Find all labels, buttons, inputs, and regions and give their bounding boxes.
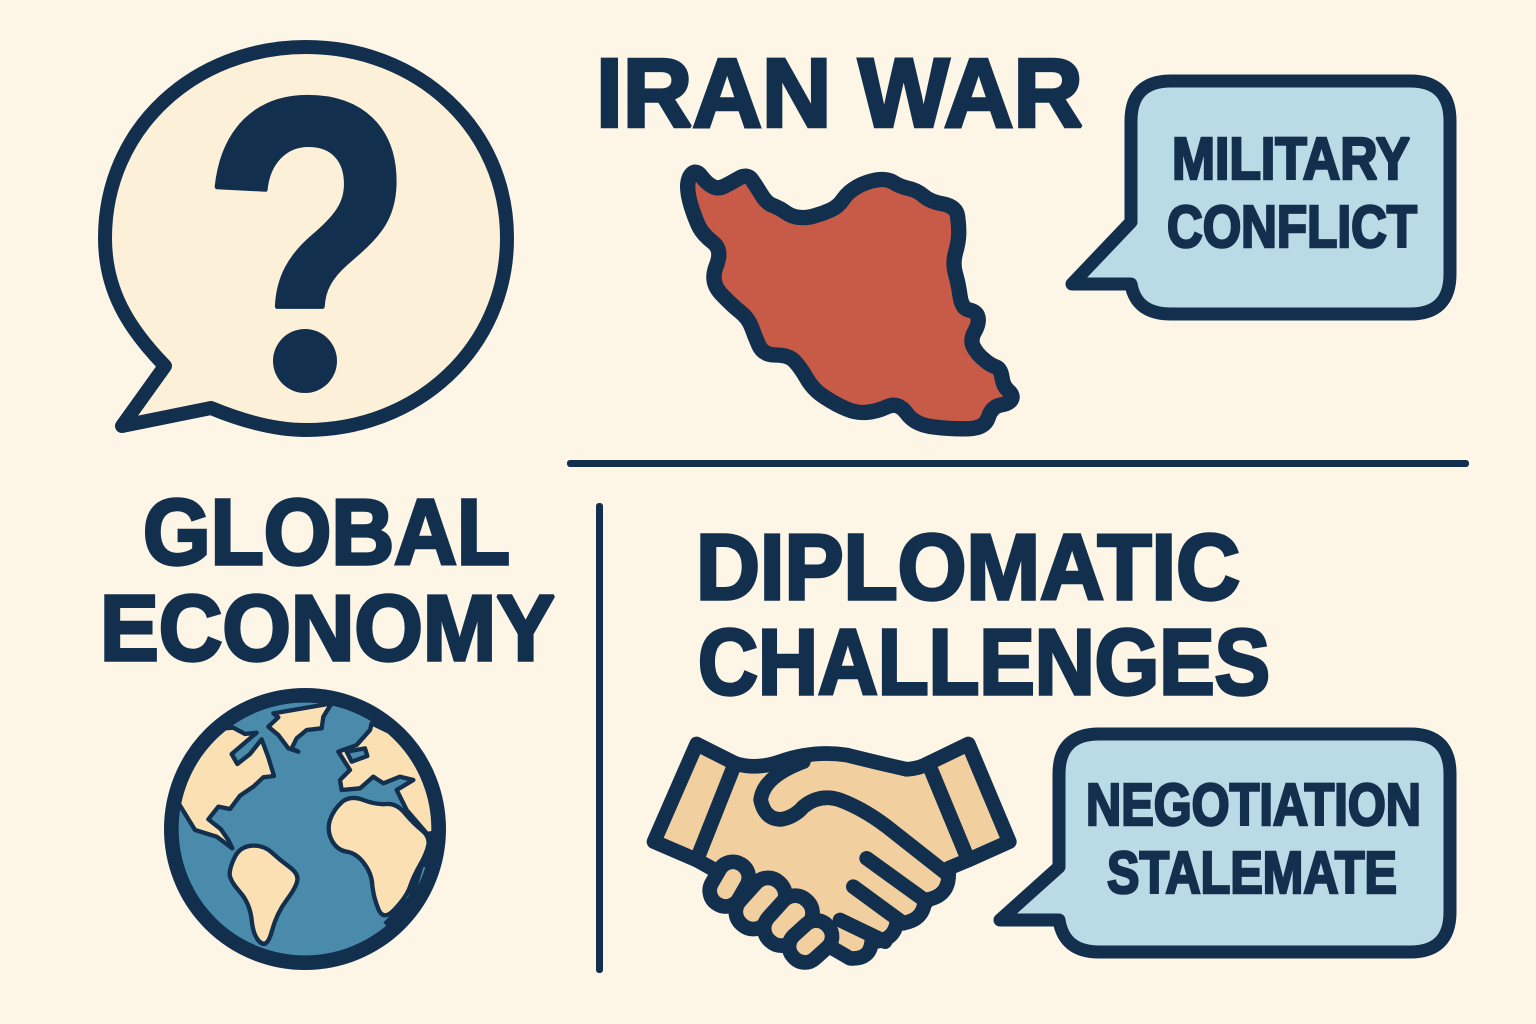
callout: negotiation stalemate: STALEMATE: [1107, 840, 1397, 906]
title: Iran War: IRAN WAR: [596, 38, 1083, 148]
heading: Diplomatic Challenges: DIPLOMATIC: [696, 515, 1240, 619]
heading: Global Economy: GLOBAL: [143, 480, 510, 584]
heading: Global Economy: ECONOMY: [100, 576, 555, 680]
land: Africa: [329, 798, 429, 915]
land: Eurasia: [338, 723, 447, 834]
map: Iran: [688, 172, 1012, 429]
icon: question mark speech bubble: [98, 40, 514, 437]
heading: Diplomatic Challenges: CHALLENGES: [698, 610, 1270, 714]
divider: vertical: [596, 503, 603, 973]
icon: globe: [163, 695, 450, 963]
land: Greenland: [268, 703, 332, 752]
sea: Baltic: [347, 748, 367, 762]
callout: negotiation stalemate: NEGOTIATION: [1086, 772, 1421, 838]
divider: horizontal: [567, 460, 1469, 467]
callout: military conflict: CONFLICT: [1167, 194, 1417, 260]
rim shadow: [383, 836, 432, 926]
land: North America: [163, 728, 274, 848]
callout: military conflict: [1072, 81, 1450, 314]
callout: military conflict: MILITARY: [1172, 126, 1410, 192]
heading: Diplomatic Challenges: [696, 515, 1270, 714]
icon: handshake: [654, 744, 1009, 969]
heading: Global Economy: [100, 480, 555, 680]
callout: negotiation stalemate: [1000, 734, 1450, 952]
icon: question mark speech bubble: ?: [201, 9, 415, 486]
land: South America: [230, 846, 297, 944]
